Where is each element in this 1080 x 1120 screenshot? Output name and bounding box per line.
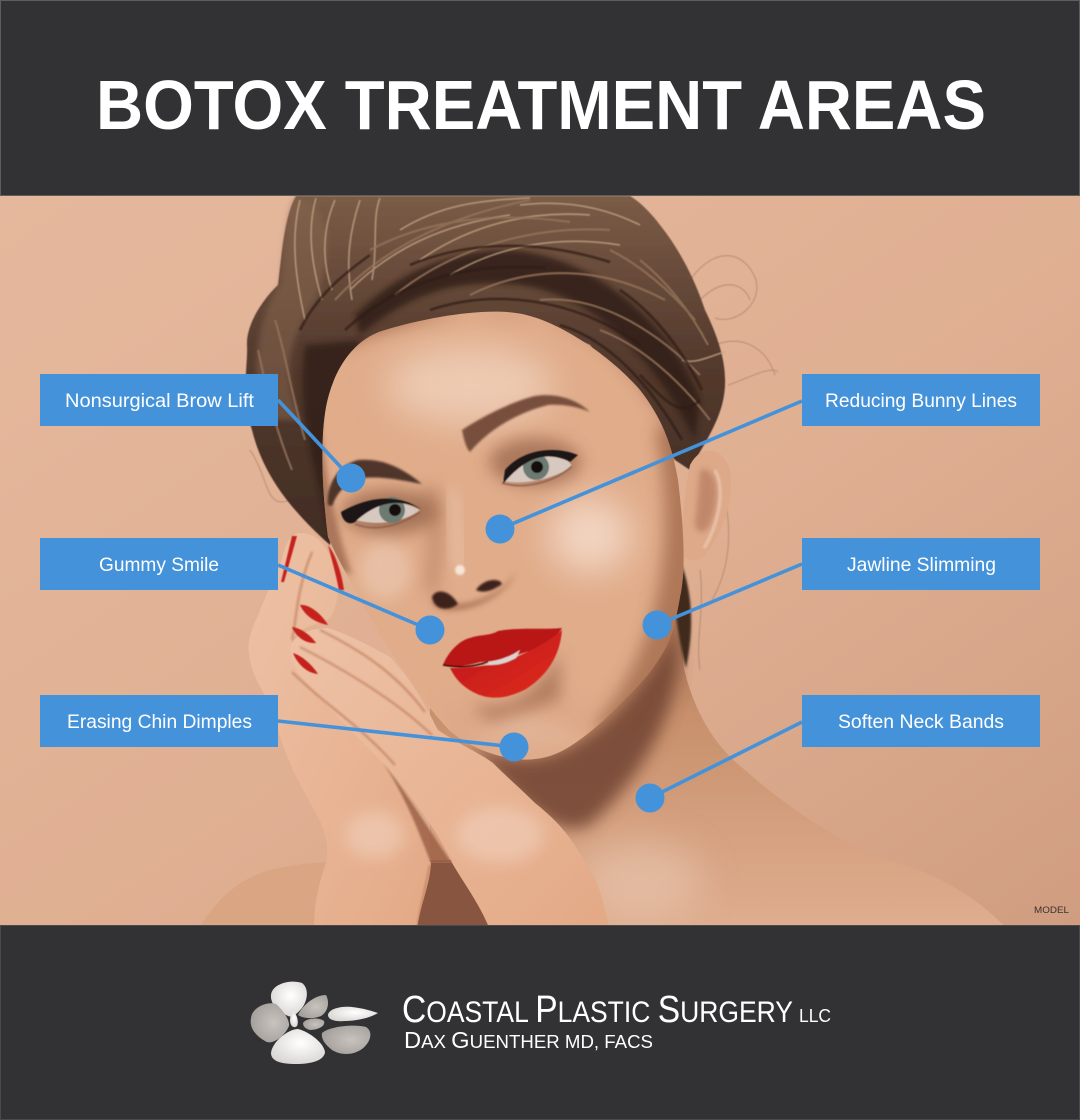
label: Erasing Chin Dimples	[40, 695, 278, 747]
logo mark	[251, 982, 378, 1064]
logo wordmark	[402, 989, 831, 1053]
front hand	[290, 628, 609, 930]
hotspot: bunny lines	[486, 514, 514, 544]
neck and shoulders	[198, 600, 1008, 930]
label: Nonsurgical Brow Lift	[40, 374, 278, 426]
model caption: MODEL	[1034, 905, 1069, 916]
face	[318, 310, 700, 760]
eye: left of image	[341, 490, 438, 534]
header bar	[0, 0, 1080, 196]
red nails	[281, 536, 344, 674]
label: Reducing Bunny Lines	[802, 374, 1040, 426]
label: Nonsurgical Brow Lift: Nonsurgical Brow Lift	[65, 390, 255, 412]
hotspot: gummy smile	[416, 616, 444, 644]
label: Erasing Chin Dimples: Erasing Chin Dimples	[67, 711, 252, 733]
hotspot: jawline	[642, 610, 672, 640]
title: BOTOX TREATMENT AREAS	[96, 66, 986, 144]
loose curls	[250, 256, 778, 670]
eye: right of image	[489, 438, 581, 486]
back hand	[249, 533, 432, 930]
label: Soften Neck Bands: Soften Neck Bands	[838, 711, 1004, 733]
label: Soften Neck Bands	[802, 695, 1040, 747]
logo wordmark: LLC	[799, 1006, 831, 1026]
stray nape hair	[672, 560, 691, 668]
logo wordmark: COASTAL PLASTIC SURGERY	[402, 989, 793, 1031]
lips	[443, 628, 562, 722]
label: Reducing Bunny Lines: Reducing Bunny Lines	[825, 390, 1017, 412]
eyebrow left of image	[328, 460, 422, 506]
hotspot: neck	[636, 784, 664, 812]
eyebrow right of image	[462, 395, 590, 452]
logo wordmark: DAX GUENTHER MD, FACS	[404, 1027, 653, 1053]
hands	[249, 533, 609, 930]
hotspot: brow	[336, 464, 366, 492]
connector lines	[278, 400, 802, 798]
label: Jawline Slimming	[802, 538, 1040, 590]
label: Gummy Smile: Gummy Smile	[99, 554, 219, 576]
label: Jawline Slimming: Jawline Slimming	[847, 554, 996, 576]
photo: model portrait	[0, 196, 1080, 930]
ear	[680, 451, 731, 560]
label: Gummy Smile	[40, 538, 278, 590]
nose	[420, 485, 516, 610]
footer bar	[0, 926, 1080, 1120]
finger separations	[292, 552, 432, 930]
hair	[245, 196, 725, 545]
hotspot: chin	[500, 732, 528, 762]
